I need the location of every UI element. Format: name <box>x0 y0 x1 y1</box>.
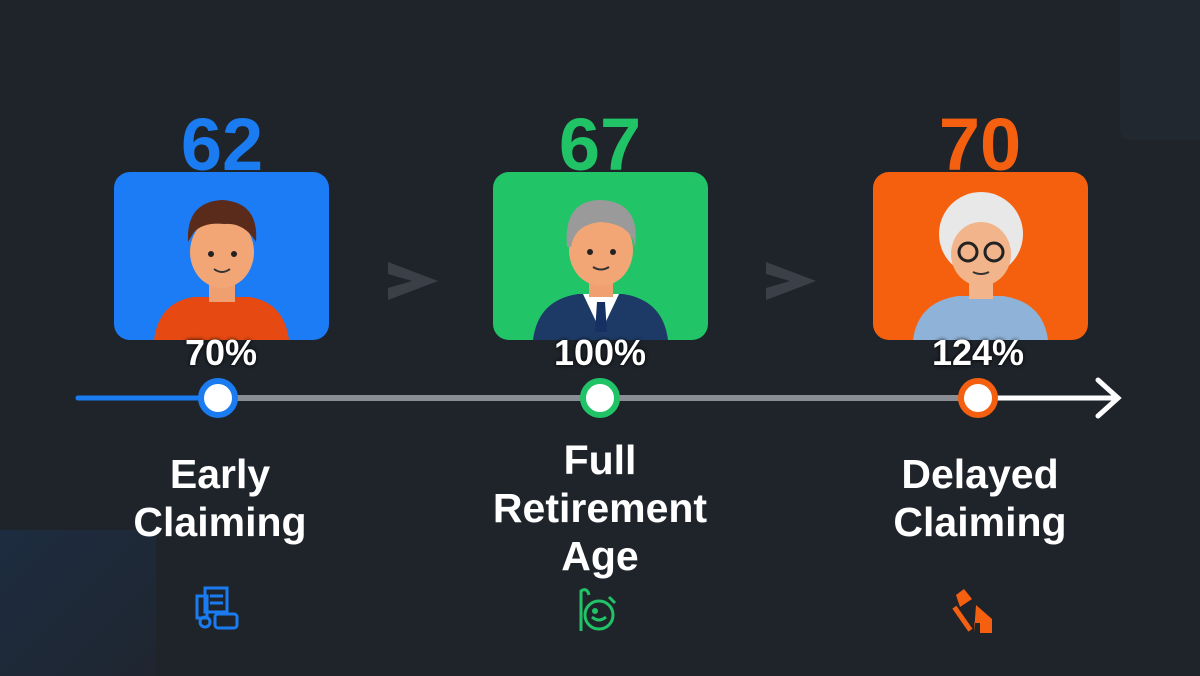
label: full retirement age: Age <box>561 533 639 579</box>
chevron arrow 2 <box>766 262 816 300</box>
label: full retirement age: Full <box>564 437 636 483</box>
label: early claiming <box>133 451 307 545</box>
background panel: bottom left <box>0 530 156 676</box>
label: delayed claiming <box>893 451 1067 545</box>
node 70 <box>958 378 998 418</box>
node 62 <box>198 378 238 418</box>
label: full retirement age: Retirement <box>493 485 707 531</box>
age 62: 62 <box>181 103 263 186</box>
age 70: 70 <box>939 103 1021 186</box>
label: full retirement age <box>493 437 707 579</box>
label: early claiming: Early <box>170 451 270 497</box>
label: delayed claiming: Claiming <box>893 499 1067 545</box>
chevron arrow 1 <box>388 262 438 300</box>
card: delayed claiming person <box>873 172 1088 340</box>
icon: smiley bag <box>580 588 616 631</box>
label: early claiming: Claiming <box>133 499 307 545</box>
icon: house with tools <box>952 589 992 633</box>
percent 100%: 100% <box>554 332 646 373</box>
card: full retirement person <box>493 172 708 340</box>
node 67 <box>580 378 620 418</box>
timeline <box>76 378 1122 418</box>
label: delayed claiming: Delayed <box>901 451 1059 497</box>
age 67: 67 <box>559 103 641 186</box>
percent 70%: 70% <box>185 332 257 373</box>
card: early claiming person <box>114 172 329 340</box>
icon: documents <box>196 586 238 630</box>
percent 124%: 124% <box>932 332 1024 373</box>
background panel: top right <box>1120 0 1200 140</box>
